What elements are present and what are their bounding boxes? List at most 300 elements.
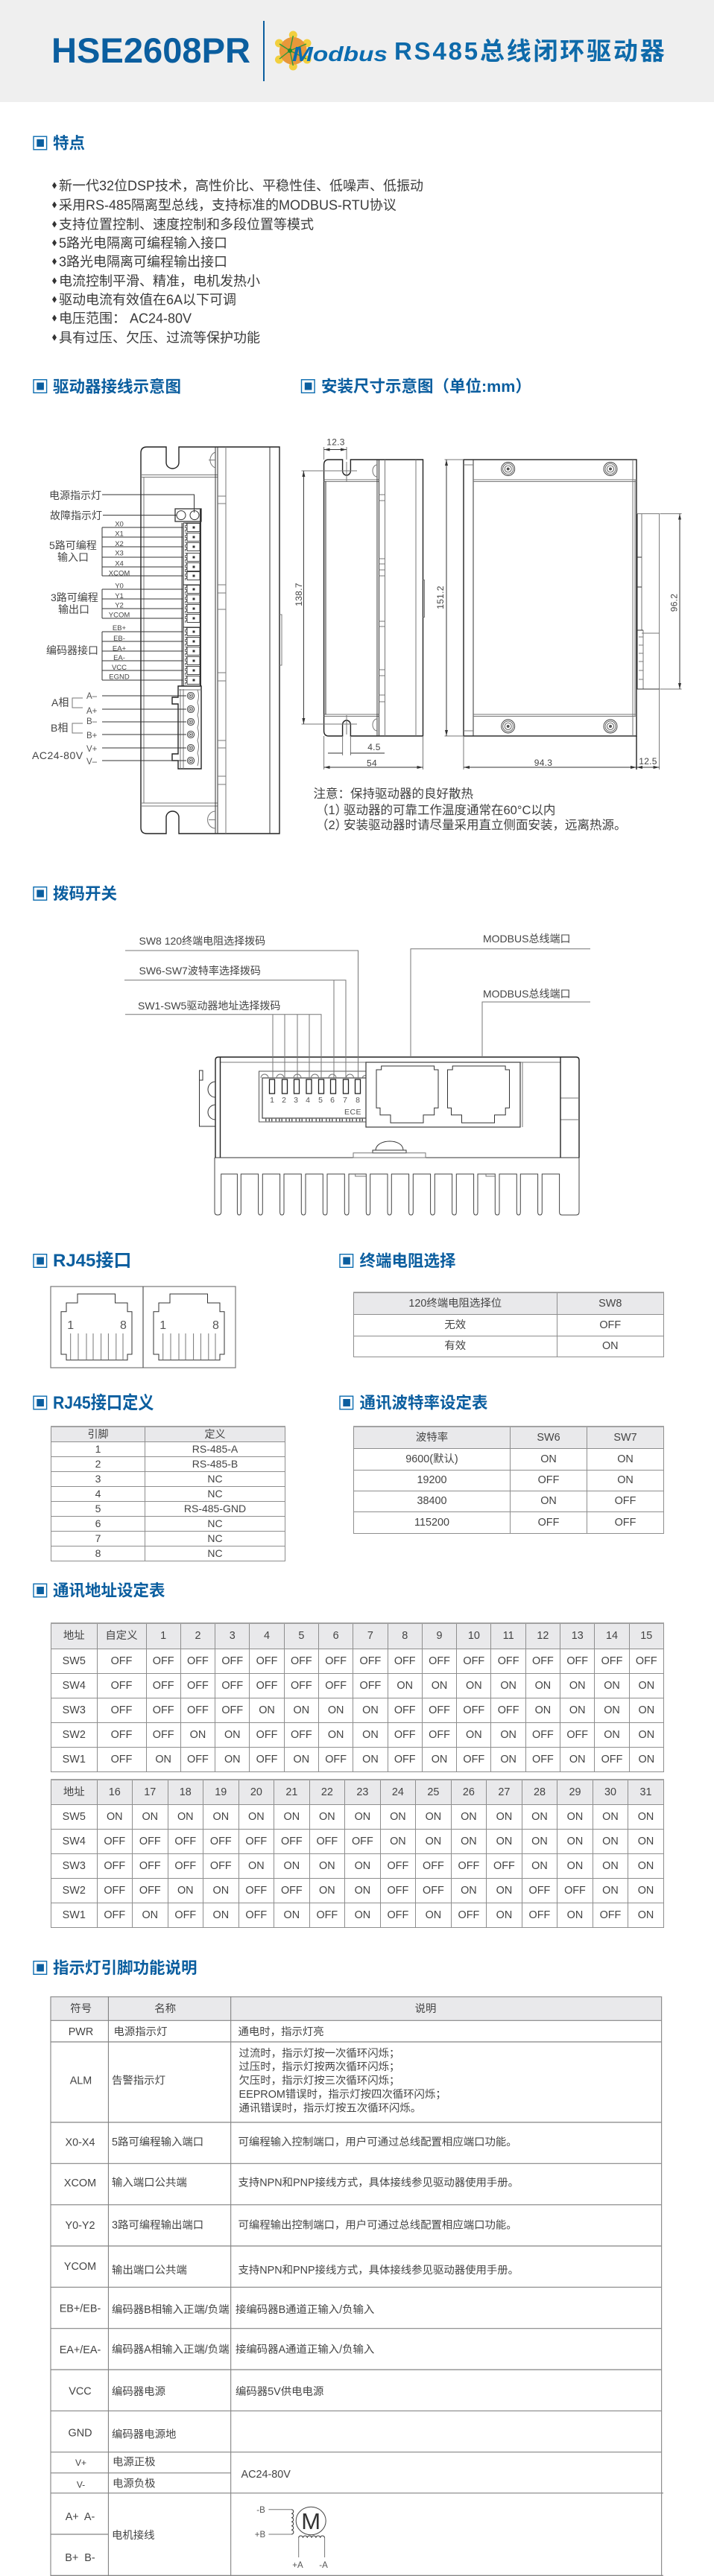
feature list: 支持位置控制、速度控制和多段位置等模式 (59, 218, 314, 232)
table: address 1 to 15: OFF (360, 1655, 381, 1667)
row: motor wiring: B+ B- (65, 2552, 95, 2564)
table: address 1 to 15: OFF (325, 1754, 347, 1766)
row: XCOM: 支持NPN和PNP接线方式，具体接线参见驱动器使用手册。 (238, 2177, 519, 2189)
table: address 1 to 15: OFF (394, 1728, 416, 1740)
table: address 16 to 31: ON (319, 1885, 335, 1897)
chart: front elevation with dimensions (435, 460, 682, 770)
table: baud rate: ON (617, 1474, 634, 1486)
table: address 1 to 15: OFF (256, 1655, 277, 1667)
row: power: V- (77, 2479, 85, 2490)
table: address 16 to 31: ON (496, 1909, 512, 1920)
signal terminal block (181, 509, 201, 686)
table: address 1 to 15: OFF (532, 1655, 554, 1667)
row: GND: GND (69, 2427, 92, 2439)
table: address 1 to 15: OFF (111, 1728, 132, 1740)
table: address 1 to 15: ON (535, 1679, 551, 1691)
table: baud rate: 9600(默认) (405, 1453, 458, 1465)
row: EA (60, 2344, 374, 2356)
wiring labels: Y2 (115, 602, 124, 609)
table: address 16 to 31: 31 (639, 1786, 651, 1798)
table: address 1 to 15: ON (155, 1754, 171, 1766)
table: RJ45 pin definition: 6 (95, 1517, 101, 1529)
table: address 16 to 31: 20 (250, 1786, 262, 1798)
header divider (263, 21, 265, 81)
table: address 1 to 15: ON (500, 1679, 516, 1691)
table: address 16 to 31: 22 (321, 1786, 333, 1798)
table: indicator and pin functions (51, 1996, 663, 2576)
DIP switch block: 5 (318, 1096, 323, 1105)
wiring labels: 电源指示灯 (49, 489, 101, 501)
row: YCOM: 输出端口公共端 (112, 2264, 187, 2277)
table: address 1 to 15: ON (294, 1754, 309, 1766)
row: Y0-Y2: 3路可编程输出端口 (112, 2218, 203, 2232)
table: address 1 to 15: 地址 (63, 1630, 85, 1642)
mounting screw (353, 1141, 426, 1158)
header row: 说明 (415, 2002, 436, 2015)
table: RJ45 pin definition: RS-485-A (192, 1443, 238, 1455)
table: address 16 to 31: 23 (356, 1786, 368, 1798)
table: address 1 to 15: ON (604, 1728, 620, 1740)
feature list: 电压范围： AC24-80V (59, 311, 192, 326)
row: EB: 接编码器B通道正输入/负输入 (236, 2303, 374, 2316)
table: address 16 to 31: OFF (316, 1909, 338, 1920)
wiring labels: YCOM (109, 611, 130, 620)
feature list: 新一代32位DSP技术，高性价比、平稳性佳、低噪声、低振动 (59, 179, 423, 194)
table: address 1 to 15: 13 (572, 1630, 584, 1642)
row: power: 电源负极 (113, 2478, 156, 2490)
feature list: 采用RS-485隔离型总线，支持标准的MODBUS-RTU协议 (59, 198, 397, 213)
table: address 16 to 31: ON (638, 1885, 654, 1897)
table: address 1 to 15: 15 (640, 1630, 652, 1642)
installation notes: 注意： (313, 787, 350, 801)
table: address 1 to 15: OFF (256, 1754, 277, 1766)
wiring labels: Y1 (115, 592, 124, 600)
table: address 1 to 15: 8 (402, 1630, 408, 1642)
table: address 1 to 15: 10 (468, 1630, 480, 1642)
installation notes (313, 787, 626, 832)
dimension: 12.3: 12.3 (326, 437, 345, 447)
table: address 16 to 31: ON (638, 1810, 654, 1822)
table: address 1 to 15: ON (362, 1754, 379, 1766)
table: address 16 to 31: OFF (174, 1909, 196, 1920)
wiring labels: V+ (86, 745, 98, 754)
table: address 16 to 31: ON (355, 1859, 370, 1871)
table: address 16 to 31: OFF (529, 1885, 550, 1897)
switch callout labels: MODBUS总线端口 (483, 933, 570, 945)
table: address 16 to 31: ON (602, 1859, 619, 1871)
table: address 16 to 31: OFF (458, 1909, 479, 1920)
table: address 1 to 15: OFF (325, 1655, 347, 1667)
table: address 16 to 31: ON (213, 1885, 229, 1897)
table: address 16 to 31: 26 (463, 1786, 475, 1798)
table: address 16 to 31: OFF (316, 1836, 338, 1847)
row: EB: EB+/EB- (60, 2303, 101, 2315)
table: address 1 to 15: ON (224, 1728, 241, 1740)
table: baud rate: ON (540, 1453, 557, 1465)
table: termination resistor: 无效 (444, 1319, 466, 1330)
table: address 16 to 31: OFF (104, 1885, 125, 1897)
table: termination resistor: SW8 (598, 1298, 622, 1310)
icon: motor wiring: M (301, 2508, 320, 2534)
feature list: 5路光电隔离可编程输入接口 (59, 235, 227, 250)
row: ALM (70, 2047, 446, 2114)
table: RJ45 pin definition: 8 (95, 1547, 101, 1559)
DIP switch block: 6 (330, 1096, 335, 1105)
table: RJ45 pin definition: RS-485-B (192, 1458, 238, 1470)
row: EA: 接编码器A通道正输入/负输入 (236, 2344, 374, 2355)
table: address 16 to 31: OFF (423, 1859, 444, 1871)
table: RJ45 pin definition: NC (207, 1547, 223, 1559)
row: X0-X4: 5路可编程输入端口 (112, 2136, 203, 2148)
table: address 1 to 15: OFF (153, 1704, 174, 1716)
table: address 16 to 31: ON (355, 1909, 370, 1920)
table: address 16 to 31: ON (177, 1885, 194, 1897)
table: baud rate: SW7 (613, 1432, 637, 1444)
wiring labels: EB+ (113, 624, 127, 632)
table: address 1 to 15: SW4 (63, 1679, 86, 1691)
table: address 16 to 31: 28 (534, 1786, 546, 1798)
heading: RJ45 definition: RJ45接口定义 (53, 1393, 154, 1413)
table: baud rate: OFF (538, 1474, 559, 1486)
wiring labels: Y0 (115, 583, 124, 590)
table: baud rate: OFF (615, 1495, 636, 1507)
table: address 16 to 31: ON (284, 1810, 300, 1822)
table: termination resistor: ON (602, 1340, 619, 1352)
table: address 16 to 31: ON (355, 1885, 370, 1897)
heading: DIP switch: 拨码开关 (53, 885, 118, 903)
icon: motor wiring (255, 2506, 328, 2570)
table: address 1 to 15: ON (466, 1728, 482, 1740)
table: address 1 to 15: OFF (221, 1704, 243, 1716)
table: address 16 to 31: ON (213, 1810, 229, 1822)
table: address 1 to 15: OFF (256, 1728, 277, 1740)
wiring labels: X3 (115, 550, 124, 557)
table: address 16 to 31: OFF (174, 1836, 196, 1847)
row: EA: 编码器A相输入正端/负端 (112, 2344, 230, 2355)
table: RJ45 pin definition: NC (207, 1517, 223, 1529)
DIP switch block (259, 1071, 368, 1122)
table: address 1 to 15: OFF (221, 1655, 243, 1667)
feature list: 3路光电隔离可编程输出接口 (59, 255, 227, 270)
DIP switch block: 8 (356, 1096, 360, 1105)
row: ALM: 过流时，指示灯按一次循环闪烁； (238, 2047, 399, 2060)
dimension: 96.2 (660, 514, 682, 689)
row: power: AC24-80V (241, 2469, 291, 2481)
table: address 16 to 31: OFF (245, 1836, 267, 1847)
table: address 1 to 15: ON (362, 1704, 379, 1716)
table: address 1 to 15: 14 (606, 1630, 618, 1642)
row: motor wiring: A+ A- (66, 2511, 95, 2523)
dimension: 96.2: 96.2 (669, 594, 680, 612)
RJ45 connector 1 (61, 1294, 132, 1360)
RJ45 connector 2: 1 (159, 1319, 166, 1332)
table: address 1 to 15: 11 (503, 1630, 514, 1642)
table: address 1 to 15: OFF (153, 1655, 174, 1667)
wiring labels: 输出口 (58, 603, 89, 615)
table: address 16 to 31: OFF (352, 1836, 373, 1847)
table: address 1 to 15: ON (535, 1704, 551, 1716)
wiring labels: B– (86, 717, 98, 726)
dimension: 151.2: 151.2 (435, 586, 446, 609)
table: address 1 to 15: OFF (463, 1704, 484, 1716)
chart: DIP switch diagram (124, 933, 590, 1215)
wiring labels: 输入口 (57, 551, 89, 563)
table: termination resistor (353, 1292, 664, 1357)
table: address 16 to 31: ON (319, 1859, 335, 1871)
table: address 16 to 31: ON (567, 1836, 583, 1847)
table: address 1 to 15: OFF (111, 1704, 132, 1716)
table: address 16 to 31: SW5 (63, 1810, 86, 1822)
row: Y0-Y2: 可编程输出控制端口，用户可通过总线配置相应端口功能。 (238, 2218, 517, 2232)
row: power: V+ (75, 2458, 86, 2468)
table: address 1 to 15: SW1 (63, 1754, 86, 1766)
switch callout lines (124, 949, 590, 1079)
row: ALM: EEPROM错误时，指示灯按四次循环闪烁； (238, 2088, 446, 2101)
table: address 1 to 15: ON (328, 1704, 344, 1716)
table: RJ45 pin definition: 7 (95, 1532, 101, 1544)
table: address 1 to 15: OFF (187, 1679, 209, 1691)
table: address 16 to 31: 24 (392, 1786, 404, 1798)
table: address 1 to 15: OFF (221, 1679, 243, 1691)
table: address 16 to 31: ON (496, 1885, 512, 1897)
table: address 16 to 31: OFF (104, 1836, 125, 1847)
table: address 16 to 31: SW2 (63, 1885, 86, 1897)
switch callout labels (138, 933, 570, 1012)
installation notes: 安装驱动器时请尽量采用直立侧面安装，远离热源。 (344, 818, 626, 832)
table: address 16 to 31: OFF (529, 1909, 550, 1920)
switch callout labels: SW8 120终端电阻选择拨码 (139, 935, 265, 947)
RJ45 sockets (366, 1062, 522, 1127)
dimension: 54 (324, 736, 423, 770)
installation notes: 保持驱动器的良好散热 (350, 787, 474, 801)
DIP switch block: 1 (270, 1096, 274, 1105)
wiring labels: XCOM (109, 569, 130, 578)
table: address 16 to 31: ON (531, 1810, 548, 1822)
table: address 1 to 15: ON (604, 1704, 620, 1716)
table: RJ45 pin definition: 1 (95, 1443, 101, 1455)
feature list (52, 179, 423, 346)
DIP switch block: 3 (294, 1096, 298, 1105)
dimension: 12.5 (636, 689, 660, 770)
table: address 1 to 15: OFF (111, 1679, 132, 1691)
dimension: 138.7: 138.7 (294, 583, 304, 606)
table: address 1 to 15: ON (432, 1679, 447, 1691)
table: address 1 to 15: OFF (601, 1655, 622, 1667)
product title: HSE2608PR (51, 31, 250, 70)
row: YCOM: YCOM (64, 2261, 96, 2273)
wiring labels: AC24-80V (32, 749, 83, 761)
switch callout labels: SW6-SW7波特率选择拨码 (139, 965, 261, 977)
table: address 1 to 15: OFF (498, 1655, 519, 1667)
table: address 1 to 15: ON (569, 1679, 586, 1691)
table: address 1 to 15: 6 (333, 1630, 339, 1642)
table: baud rate (353, 1426, 664, 1534)
row: GND: 编码器电源地 (112, 2429, 176, 2440)
row: PWR: 电源指示灯 (113, 2025, 167, 2038)
table: address 1 to 15: OFF (463, 1655, 484, 1667)
table: address 16 to 31: 19 (215, 1786, 227, 1798)
table: address 1 to 15: OFF (566, 1655, 588, 1667)
wiring labels: VCC (112, 664, 127, 672)
table: RJ45 pin definition: NC (207, 1488, 223, 1500)
table: address 16 to 31: OFF (387, 1909, 408, 1920)
table: address 1 to 15: OFF (187, 1704, 209, 1716)
table: RJ45 pin definition: NC (207, 1473, 223, 1485)
table: address 16 to 31: ON (531, 1836, 548, 1847)
table: address 16 to 31: ON (319, 1810, 335, 1822)
table: address 16 to 31: ON (142, 1909, 158, 1920)
table: address 1 to 15: ON (638, 1728, 654, 1740)
table: address 1 to 15: SW2 (63, 1728, 86, 1740)
table: address 16 to 31: OFF (564, 1885, 586, 1897)
table: address 16 to 31: 30 (604, 1786, 616, 1798)
heading: termination resistor: 终端电阻选择 (359, 1252, 456, 1270)
wiring labels: 编码器接口 (46, 644, 98, 656)
RJ45 connector 2 (154, 1294, 224, 1360)
table: baud rate: 38400 (417, 1495, 447, 1507)
table: address 1 to 15: SW3 (63, 1704, 86, 1716)
table: address 16 to 31: ON (213, 1909, 229, 1920)
table: address 16 to 31: ON (567, 1810, 583, 1822)
table: address 16 to 31: ON (461, 1885, 477, 1897)
product subtitle: RS485总线闭环驱动器 (394, 37, 667, 65)
row: motor wiring: 电机接线 (112, 2529, 155, 2542)
feature list: 驱动电流有效值在6A以下可调 (59, 292, 236, 307)
feature list: 具有过压、欠压、过流等保护功能 (59, 331, 260, 346)
table: address 16 to 31: ON (496, 1810, 512, 1822)
table: address 1 to 15: ON (569, 1754, 586, 1766)
table: address 16 to 31: OFF (139, 1836, 161, 1847)
table: address 1 to 15: ON (259, 1704, 275, 1716)
wiring labels: A相 (51, 697, 69, 708)
row: XCOM: XCOM (64, 2177, 96, 2189)
row: VCC (69, 2385, 323, 2398)
heading: features: 特点 (53, 134, 85, 152)
table: RJ45 pin definition: 2 (95, 1458, 101, 1470)
row: PWR: 通电时，指示灯亮 (238, 2025, 324, 2038)
table: address 16 to 31: ON (461, 1810, 477, 1822)
terminal protrusion (636, 514, 660, 689)
table: address 1 to 15 (51, 1622, 664, 1772)
table: address 16 to 31: ON (284, 1909, 300, 1920)
table: address 16 to 31: 18 (180, 1786, 192, 1798)
heading: installation dimensions: 安装尺寸示意图（单位:mm） (321, 377, 531, 396)
table: termination resistor: 120终端电阻选择位 (408, 1298, 502, 1310)
table: address 16 to 31: ON (638, 1836, 654, 1847)
table: baud rate: 115200 (414, 1517, 449, 1529)
row: EB (60, 2303, 374, 2316)
table: address 16 to 31: 21 (285, 1786, 297, 1798)
row: YCOM (64, 2261, 519, 2277)
wiring labels: EA- (113, 654, 125, 662)
feature list: 电流控制平滑、精准，电机发热小 (59, 274, 260, 289)
table: address 16 to 31: OFF (174, 1859, 196, 1871)
table: termination resistor: OFF (599, 1319, 621, 1330)
heat sink fins (215, 1158, 579, 1215)
wiring labels: EB- (113, 635, 125, 643)
table: address 1 to 15: OFF (429, 1704, 450, 1716)
table: address 16 to 31: ON (567, 1859, 583, 1871)
wiring labels: B+ (86, 732, 98, 740)
row: Y0-Y2: Y0-Y2 (66, 2220, 95, 2232)
row: PWR: PWR (69, 2026, 93, 2038)
table: address 16 to 31: OFF (210, 1836, 232, 1847)
wiring labels: X0 (115, 520, 124, 529)
dimension: 12.5: 12.5 (639, 756, 657, 767)
table: address 16 to 31: ON (390, 1810, 406, 1822)
wiring labels: B相 (51, 722, 68, 734)
table: RJ45 pin definition: NC (207, 1532, 223, 1544)
wiring labels: 故障指示灯 (50, 510, 102, 521)
heading: features (34, 134, 85, 152)
table: address 1 to 15: ON (328, 1728, 344, 1740)
table: RJ45 pin definition: RS-485-GND (184, 1503, 246, 1514)
table: address 1 to 15: 12 (537, 1630, 549, 1642)
wiring labels: X4 (115, 560, 124, 568)
header row (70, 2002, 436, 2015)
table: baud rate: 19200 (417, 1474, 447, 1486)
heading: baud rate: 通讯波特率设定表 (359, 1393, 488, 1412)
table: address 1 to 15: ON (500, 1754, 516, 1766)
wiring labels: A– (86, 692, 98, 701)
table: address 16 to 31: ON (638, 1909, 654, 1920)
heading: indicator and pin functions: 指示灯引脚功能说明 (53, 1959, 198, 1977)
row: X0-X4: X0-X4 (66, 2136, 95, 2148)
row: VCC: 编码器电源 (112, 2385, 165, 2398)
table: address 16 to 31: OFF (139, 1885, 161, 1897)
table: RJ45 pin definition: 3 (95, 1473, 101, 1485)
icon: modbus logo (275, 31, 388, 70)
table: address 1 to 15: 自定义 (105, 1630, 138, 1642)
table: address 16 to 31: 17 (144, 1786, 156, 1798)
table: address 16 to 31: OFF (423, 1885, 444, 1897)
table: address 1 to 15: OFF (111, 1655, 132, 1667)
table: address 16 to 31: ON (496, 1836, 512, 1847)
row: XCOM: 输入端口公共端 (112, 2177, 187, 2189)
table: address 1 to 15: OFF (394, 1655, 416, 1667)
wiring labels: V– (86, 758, 98, 767)
table: address 16 to 31: ON (602, 1885, 619, 1897)
table: address 16 to 31: 29 (569, 1786, 581, 1798)
table: address 1 to 15: OFF (111, 1754, 132, 1766)
table: address 1 to 15: ON (362, 1728, 379, 1740)
table: address 1 to 15: ON (432, 1754, 447, 1766)
table: baud rate: ON (617, 1453, 634, 1465)
switch callout labels: SW1-SW5驱动器地址选择拨码 (138, 1000, 280, 1012)
wiring labels: 5路可编程 (49, 539, 97, 551)
row: X0-X4: 可编程输入控制端口，用户可通过总线配置相应端口功能。 (238, 2135, 517, 2148)
DIP switch block: 7 (343, 1096, 347, 1105)
table: address 1 to 15: OFF (394, 1754, 416, 1766)
table: address 1 to 15: OFF (187, 1655, 209, 1667)
table: address 16 to 31: ON (426, 1810, 441, 1822)
table: address 16 to 31: OFF (104, 1909, 125, 1920)
table: address 1 to 15: 3 (230, 1630, 236, 1642)
row: ALM: 过压时，指示灯按两次循环闪烁； (238, 2061, 399, 2073)
row: ALM: 欠压时，指示灯按三次循环闪烁； (238, 2074, 399, 2087)
icon: motor wiring: -A (319, 2561, 328, 2570)
indicator LEDs (175, 509, 201, 521)
table: address 1 to 15: OFF (153, 1679, 174, 1691)
table: address 16 to 31: ON (142, 1810, 158, 1822)
dimension: 94.3: 94.3 (534, 758, 552, 768)
chart: driver wiring diagram (32, 447, 282, 834)
table: address 1 to 15: ON (224, 1754, 241, 1766)
table: address 16 to 31: ON (567, 1909, 583, 1920)
RJ45 connector 1: 8 (120, 1319, 127, 1332)
table: address 16 to 31: ON (248, 1810, 265, 1822)
table: address 1 to 15: 1 (160, 1630, 166, 1642)
